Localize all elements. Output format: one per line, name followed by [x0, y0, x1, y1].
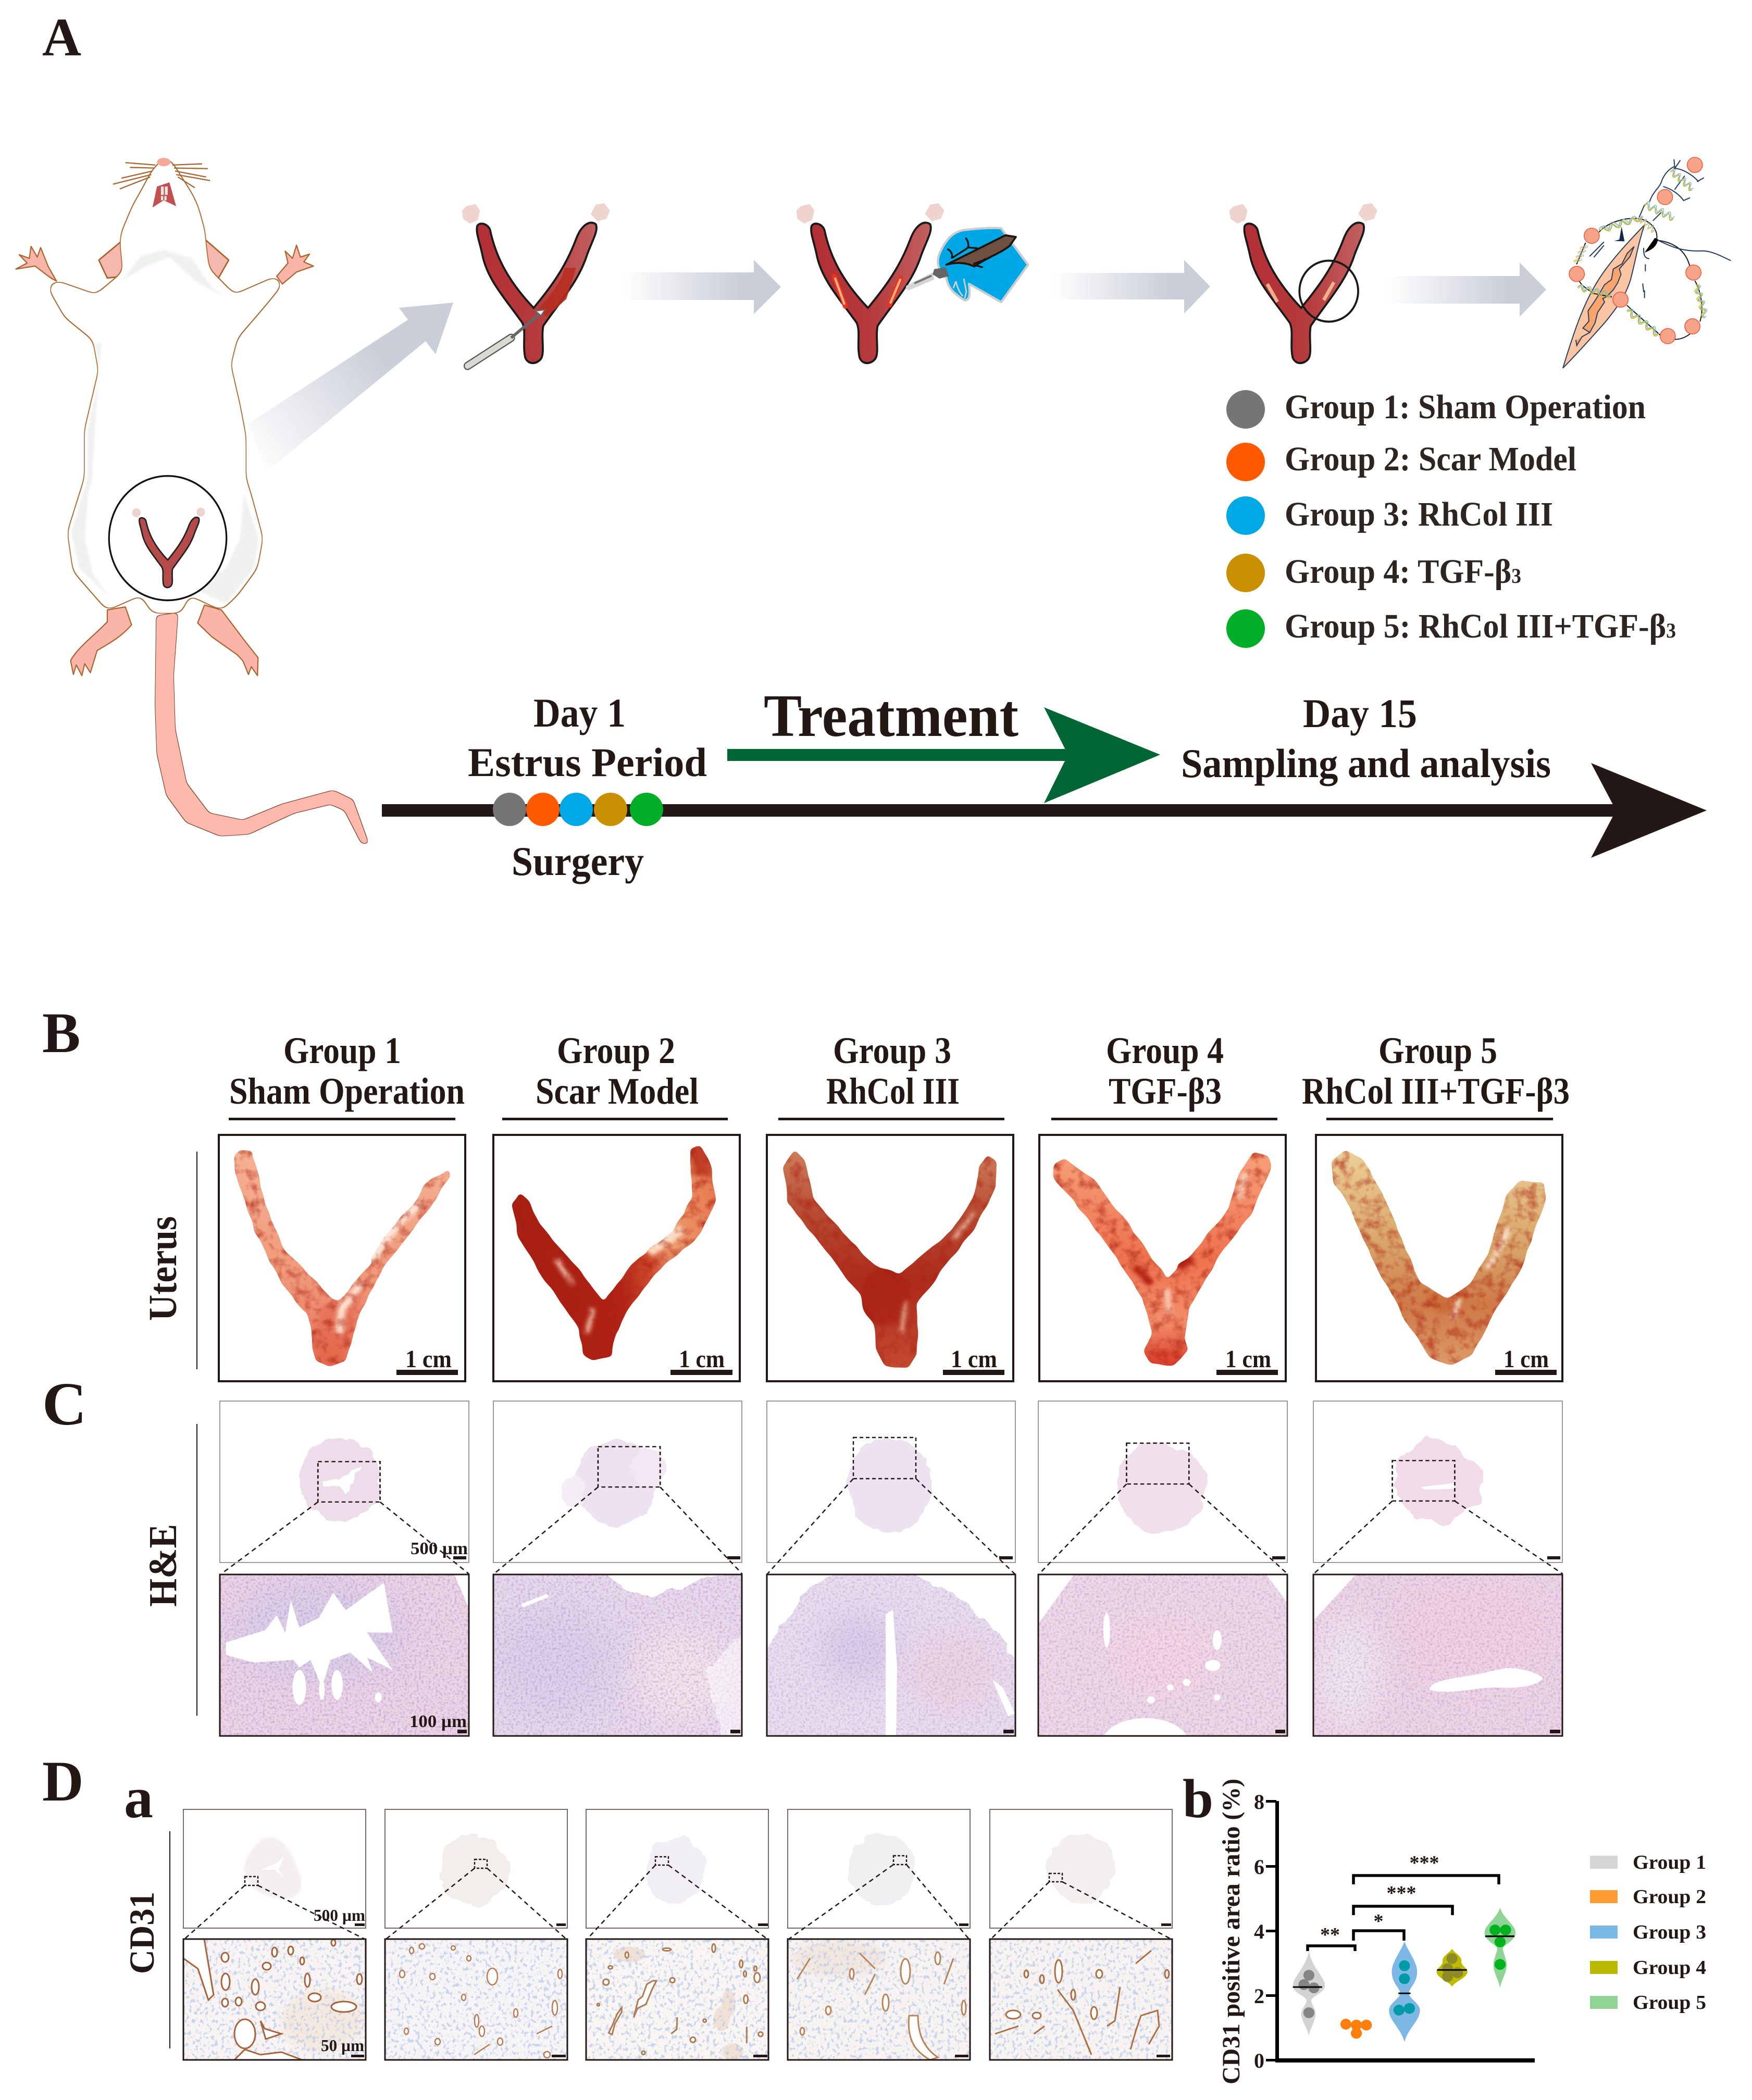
legend: treatment groups: Group 1: Sham Operation — [1285, 388, 1646, 426]
column headers: Group 1 — [283, 1030, 401, 1071]
y axis tick labels — [1254, 1790, 1264, 2072]
legend: CD31 chart groups: Group 5 — [1633, 1992, 1706, 2014]
sub-panel label a: a — [124, 1766, 153, 1830]
column headers — [229, 1030, 1570, 1120]
timeline label: day 1 — [468, 690, 707, 785]
arrow: rat to uterus — [248, 303, 453, 472]
black knot — [1645, 238, 1658, 253]
y axis tick labels: 8 — [1254, 1790, 1264, 1814]
treatment label: Treatment — [764, 683, 1018, 749]
panel: H&E overview group 1 — [220, 1401, 469, 1574]
panel label C: C — [42, 1370, 86, 1438]
legend: treatment groups: Group 5: RhCol III+TGF-β3 — [1285, 607, 1676, 645]
rat teeth — [161, 186, 168, 201]
row label: CD31: CD31 — [122, 1892, 161, 1974]
group 1 dots — [1298, 1970, 1320, 2018]
timeline label: day 1: Estrus Period — [468, 740, 707, 785]
significance stars: *** — [1387, 1882, 1416, 1904]
timeline label: day 15 — [1181, 691, 1551, 786]
illustration: sutured wound with collagen and cells — [1563, 157, 1731, 368]
panel: H&E overview group 1: 500 µm — [411, 1539, 468, 1558]
panel: uterus photo group 2 — [493, 1135, 740, 1381]
group 4 dots — [1442, 1953, 1463, 1982]
uterus diagram: step 2 with treatment — [796, 203, 944, 363]
panel: CD31 magnified group 1: 50 µm — [321, 2036, 364, 2055]
panel: CD31 magnified group 4 — [788, 1939, 970, 2060]
panel: H&E magnified group 1 — [220, 1574, 469, 1736]
legend: CD31 chart groups: Group 3 — [1633, 1921, 1706, 1943]
circle showing uterus location — [109, 476, 227, 601]
icon: hand with scalpel on blue cloth — [906, 228, 1028, 302]
panel: uterus photo group 5: 1 cm — [1504, 1345, 1549, 1373]
blue cloth — [938, 228, 1028, 302]
panel: CD31 overview group 1 — [183, 1809, 366, 1939]
column headers: RhCol III — [826, 1070, 960, 1112]
arrow: step 2 to step 3 — [1051, 260, 1210, 314]
panel: CD31 magnified group 5 — [990, 1939, 1172, 2060]
small uterus — [132, 508, 205, 588]
panel: uterus photo group 4: 1 cm — [1225, 1345, 1271, 1373]
brown instrument — [947, 235, 1016, 267]
rat mouth — [153, 182, 176, 207]
panel: H&E magnified group 4 — [1038, 1574, 1287, 1736]
curette tool — [468, 338, 511, 366]
timeline label: day 1: Day 1 — [533, 690, 626, 735]
tool head — [933, 267, 949, 279]
panel: H&E magnified group 1: 100 µm — [409, 1712, 467, 1731]
illustration: rat — [16, 158, 369, 844]
median lines — [1293, 1935, 1514, 1994]
panel label B: B — [42, 1001, 80, 1065]
suture thread — [1577, 218, 1702, 340]
panel: H&E overview group 3 — [767, 1401, 1015, 1574]
panel: CD31 overview group 5 — [990, 1809, 1172, 1939]
row label: H&E: H&E — [141, 1524, 185, 1607]
rat right ear — [202, 240, 229, 280]
significance stars: ** — [1320, 1924, 1340, 1946]
treatment arrow — [727, 707, 1160, 803]
branching lines — [947, 238, 986, 267]
panel: H&E overview group 5 — [1313, 1401, 1562, 1574]
panel: CD31 overview group 1: 500 µm — [314, 1906, 365, 1924]
panel: uterus photo group 3: 1 cm — [951, 1345, 997, 1373]
column headers: Sham Operation — [229, 1070, 465, 1112]
wound inner tear — [1576, 246, 1634, 345]
y axis tick labels: 2 — [1254, 1984, 1264, 2008]
column headers: Group 3 — [833, 1030, 951, 1071]
panel: CD31 magnified group 1 — [183, 1939, 366, 2060]
group 3 dots — [1394, 1960, 1415, 2016]
sub-panel label b: b — [1183, 1768, 1213, 1829]
timeline label: day 15: Day 15 — [1303, 691, 1417, 736]
panel: CD31 overview group 4 — [788, 1809, 970, 1939]
y axis title: CD31 positive area ratio (%) — [1217, 1779, 1245, 2084]
brown stained glands — [614, 1947, 743, 2060]
y axis tick labels: 4 — [1254, 1920, 1264, 1943]
panel: H&E magnified group 3 — [762, 1569, 1018, 1737]
cell beads — [1569, 157, 1703, 344]
upper navy threads — [1590, 160, 1731, 298]
rat ears — [99, 242, 127, 278]
axes — [1266, 1800, 1535, 2062]
wound lens — [1563, 225, 1645, 368]
significance stars: * — [1373, 1910, 1384, 1932]
panel: uterus photo group 1 — [219, 1135, 465, 1381]
column headers: Group 2 — [557, 1030, 675, 1071]
legend: CD31 chart groups: Group 1 — [1633, 1852, 1706, 1873]
uterus diagram: step 3 — [1229, 203, 1377, 363]
legend: treatment groups: Group 3: RhCol III — [1285, 495, 1553, 533]
arrow: step 3 to wound detail — [1386, 262, 1546, 317]
panel: H&E magnified group 2 — [490, 1570, 751, 1736]
rat tail — [155, 613, 369, 844]
panel label A: A — [42, 7, 81, 67]
group 2 dots — [1340, 2019, 1372, 2039]
panel: CD31 overview group 2 — [385, 1809, 567, 1939]
rat body — [48, 158, 282, 613]
panel: H&E magnified group 5 — [1313, 1574, 1562, 1736]
panel: CD31 magnified group 3 — [586, 1939, 768, 2060]
panel: CD31 magnified group 2 — [385, 1939, 567, 2060]
uterus diagram: step 1 — [462, 203, 610, 366]
legend: CD31 chart groups: Group 4 — [1633, 1957, 1706, 1979]
panel: H&E overview group 4 — [1038, 1401, 1287, 1574]
panel: uterus photo group 4 — [1039, 1135, 1286, 1381]
timeline group dots — [493, 793, 663, 826]
legend: CD31 chart groups — [1590, 1852, 1706, 2014]
panel: uterus photo group 1: 1 cm — [405, 1345, 452, 1373]
legend: treatment groups: Group 4: TGF-β3 — [1285, 553, 1521, 591]
cloth folds — [953, 279, 966, 298]
y axis tick labels: 6 — [1254, 1855, 1264, 1879]
timeline label: surgery: Surgery — [512, 839, 644, 884]
panel: uterus photo group 5 — [1316, 1135, 1562, 1381]
panel: H&E overview group 2 — [493, 1401, 742, 1574]
row label: Uterus: Uterus — [141, 1216, 185, 1321]
zoom circle — [1299, 261, 1358, 322]
timeline arrow — [382, 763, 1707, 858]
panel: CD31 overview group 3 — [586, 1809, 768, 1939]
rat paws and feet — [16, 245, 314, 676]
legend: treatment groups: Group 2: Scar Model — [1285, 440, 1576, 478]
significance stars — [1320, 1852, 1439, 1946]
panel: uterus photo group 2: 1 cm — [679, 1345, 725, 1373]
chart: CD31 positive area ratio violin plot — [1217, 1779, 1535, 2084]
group 5 dots — [1489, 1924, 1511, 1970]
column headers: Scar Model — [536, 1070, 699, 1112]
column headers: Group 5 — [1378, 1030, 1497, 1071]
column headers: Group 4 — [1106, 1030, 1224, 1071]
timeline label: day 15: Sampling and analysis — [1181, 741, 1551, 786]
collagen strands — [1573, 168, 1709, 337]
vessels — [597, 1944, 763, 2055]
tool handle — [906, 272, 934, 290]
rat nose and snout — [157, 158, 170, 166]
rat fur shading — [71, 250, 258, 604]
panel: uterus photo group 3 — [767, 1135, 1013, 1381]
legend: CD31 chart groups: Group 2 — [1633, 1886, 1706, 1908]
legend: treatment groups — [1226, 388, 1676, 648]
column headers: RhCol III+TGF-β3 — [1302, 1070, 1570, 1112]
y axis tick labels: 0 — [1254, 2049, 1264, 2072]
rat whiskers — [113, 162, 210, 189]
significance stars: *** — [1410, 1852, 1439, 1874]
column headers: TGF-β3 — [1109, 1070, 1222, 1112]
arrow: step 1 to step 2 — [622, 260, 781, 314]
panel label D: D — [42, 1749, 83, 1813]
violins — [1293, 1908, 1515, 2042]
tool handle slot — [915, 276, 931, 283]
significance brackets — [1308, 1876, 1499, 1951]
knot marker — [1614, 227, 1624, 241]
